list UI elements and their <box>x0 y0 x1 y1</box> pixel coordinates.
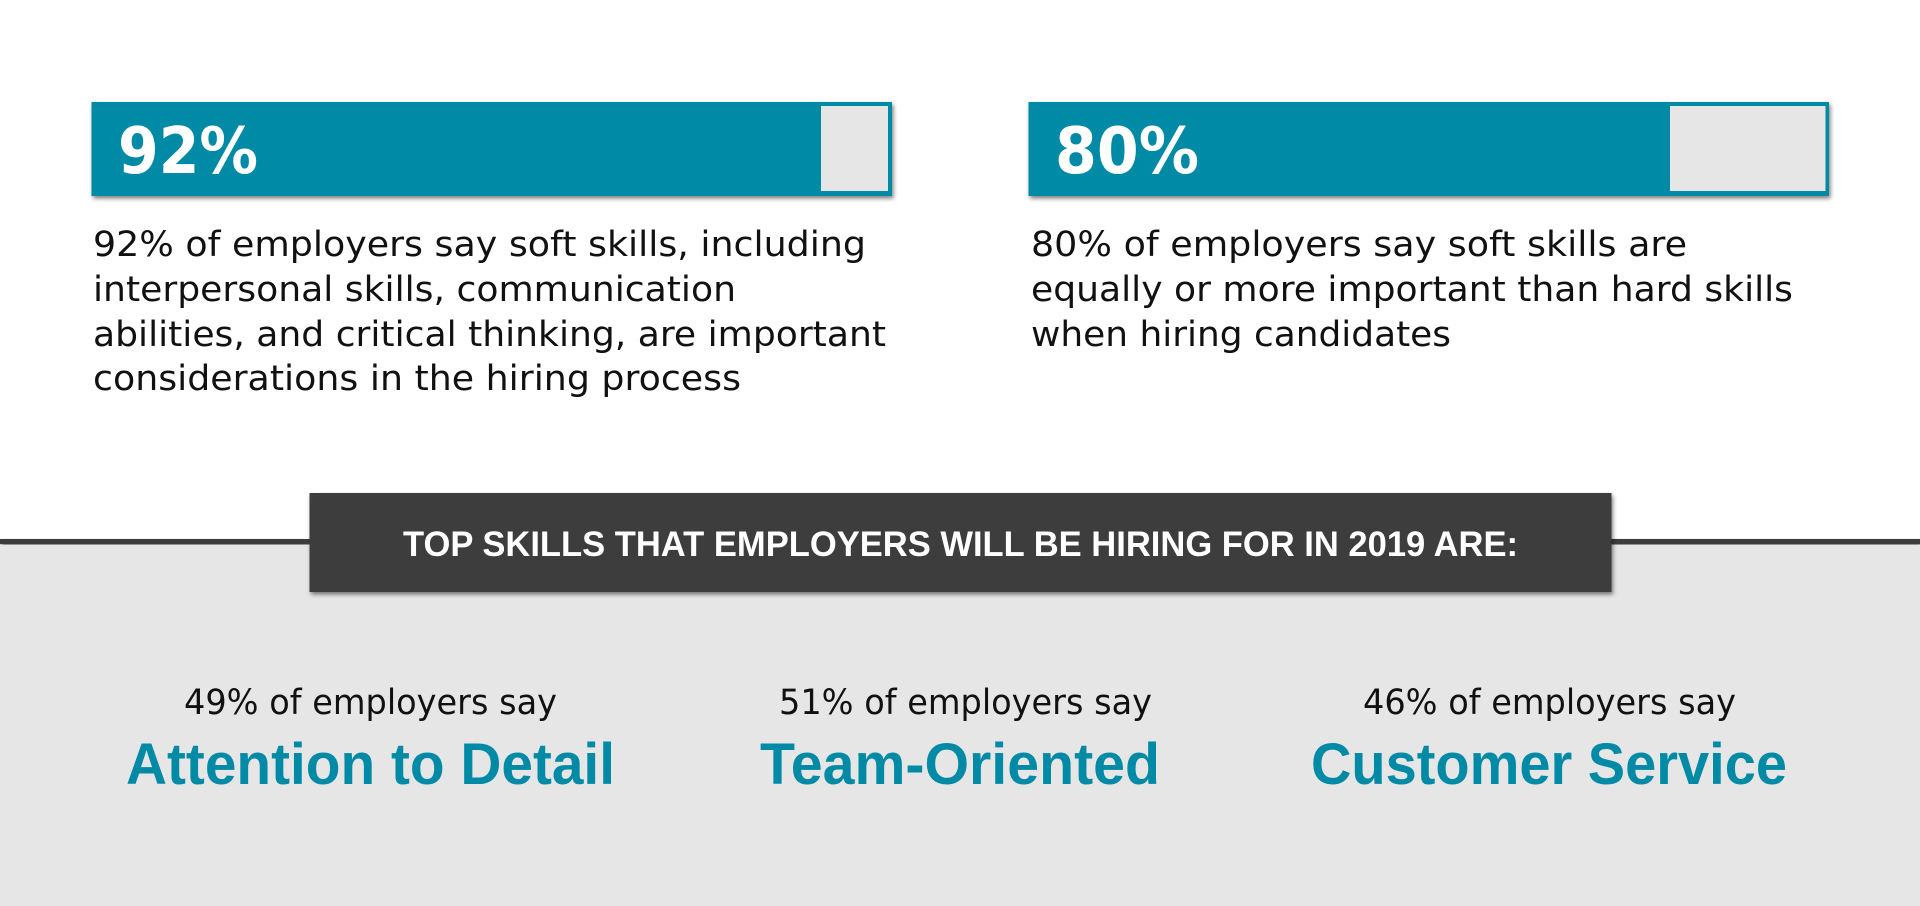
panel: 80% statistic <box>1028 102 1829 355</box>
text block: 92% description <box>93 225 886 399</box>
text block: 92% description: considerations in the hiring process <box>93 359 741 399</box>
progress bar: 92% <box>92 102 892 196</box>
skill: Attention to Detail: Attention to Detail <box>126 732 615 797</box>
skill: Customer Service <box>1311 683 1787 797</box>
text block: 80% description: 80% of employers say soft skills are <box>1031 225 1687 265</box>
text block: 92% description: abilities, and critical thinking, are important <box>93 315 886 355</box>
panel: 92% statistic <box>92 102 892 399</box>
skill: Team-Oriented: Team-Oriented <box>760 732 1160 797</box>
text block: 92% description: 92% of employers say soft skills, including <box>93 225 866 265</box>
skill: Attention to Detail: 49% of employers say <box>184 683 557 723</box>
skill: Team-Oriented <box>760 683 1160 797</box>
progress bar: 80%: 80% <box>1055 115 1199 189</box>
skill: Customer Service: Customer Service <box>1311 732 1787 797</box>
heading banner: top skills <box>310 493 1612 592</box>
skill: Attention to Detail <box>126 683 615 797</box>
progress bar: 92%: 92% <box>118 115 258 189</box>
text block: 80% description <box>1031 225 1793 355</box>
heading banner: top skills: TOP SKILLS THAT EMPLOYERS WILL BE HIRING FOR IN 2019 ARE: <box>403 525 1518 564</box>
background: lower gray band <box>0 539 1920 906</box>
progress bar: 80% <box>1028 102 1829 196</box>
skill: Customer Service: 46% of employers say <box>1363 683 1736 723</box>
text block: 80% description: when hiring candidates <box>1031 315 1451 355</box>
text block: 80% description: equally or more important than hard skills <box>1031 270 1793 310</box>
skill: Team-Oriented: 51% of employers say <box>779 683 1152 723</box>
text block: 92% description: interpersonal skills, communication <box>93 270 736 310</box>
